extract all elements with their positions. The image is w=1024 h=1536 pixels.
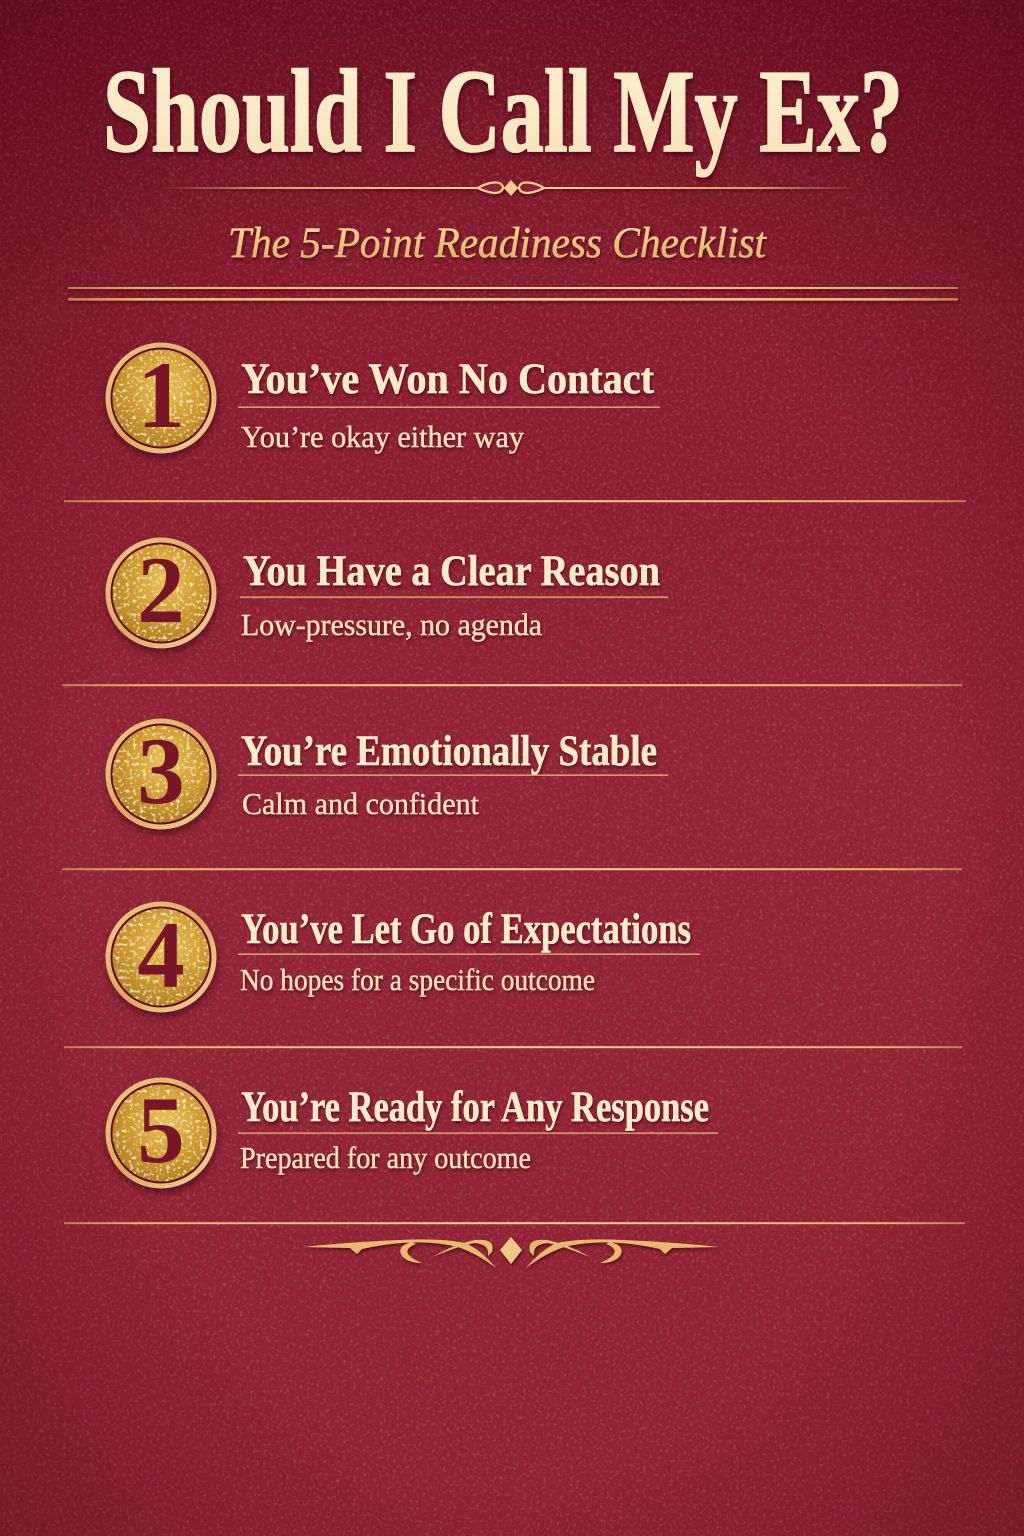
checklist item 1 <box>106 342 660 454</box>
icon: gold coin 3: 3 <box>137 718 185 824</box>
icon: gold coin 2: 2 <box>137 537 185 643</box>
description 4: No hopes for a specific outcome <box>240 962 595 997</box>
checklist item 3 <box>106 718 668 830</box>
icon: gold coin 1 <box>106 342 216 454</box>
ornament: bottom flourish <box>303 1237 719 1268</box>
checklist item 5 <box>106 1077 718 1188</box>
underline 1 <box>238 406 660 408</box>
icon: gold coin 2 <box>106 537 216 648</box>
checklist item 4 <box>106 902 700 1012</box>
ornament: title divider <box>162 180 860 196</box>
description 2: Low-pressure, no agenda <box>241 607 542 642</box>
underline 4 <box>238 954 700 955</box>
icon: gold coin 5: 5 <box>137 1077 185 1183</box>
underline 5 <box>238 1132 718 1134</box>
underline 2 <box>240 596 668 598</box>
icon: gold coin 3 <box>106 718 216 830</box>
heading 2: You Have a Clear Reason <box>243 548 660 595</box>
icon: gold coin 4 <box>106 902 216 1012</box>
checklist item 2 <box>106 537 668 648</box>
icon: gold coin 4: 4 <box>137 902 185 1008</box>
heading 3: You’re Emotionally Stable <box>241 728 657 775</box>
icon: gold coin 1: 1 <box>137 342 185 448</box>
heading 4: You’ve Let Go of Expectations <box>241 906 691 953</box>
icon: gold coin 5 <box>106 1077 216 1188</box>
header double rule <box>68 287 958 301</box>
underline 3 <box>238 774 668 776</box>
description 3: Calm and confident <box>242 786 479 821</box>
description 5: Prepared for any outcome <box>240 1140 531 1175</box>
subtitle: The 5-Point Readiness Checklist <box>228 220 767 267</box>
heading 5: You’re Ready for Any Response <box>241 1084 709 1131</box>
description 1: You’re okay either way <box>241 419 524 454</box>
heading 1: You’ve Won No Contact <box>241 356 655 403</box>
